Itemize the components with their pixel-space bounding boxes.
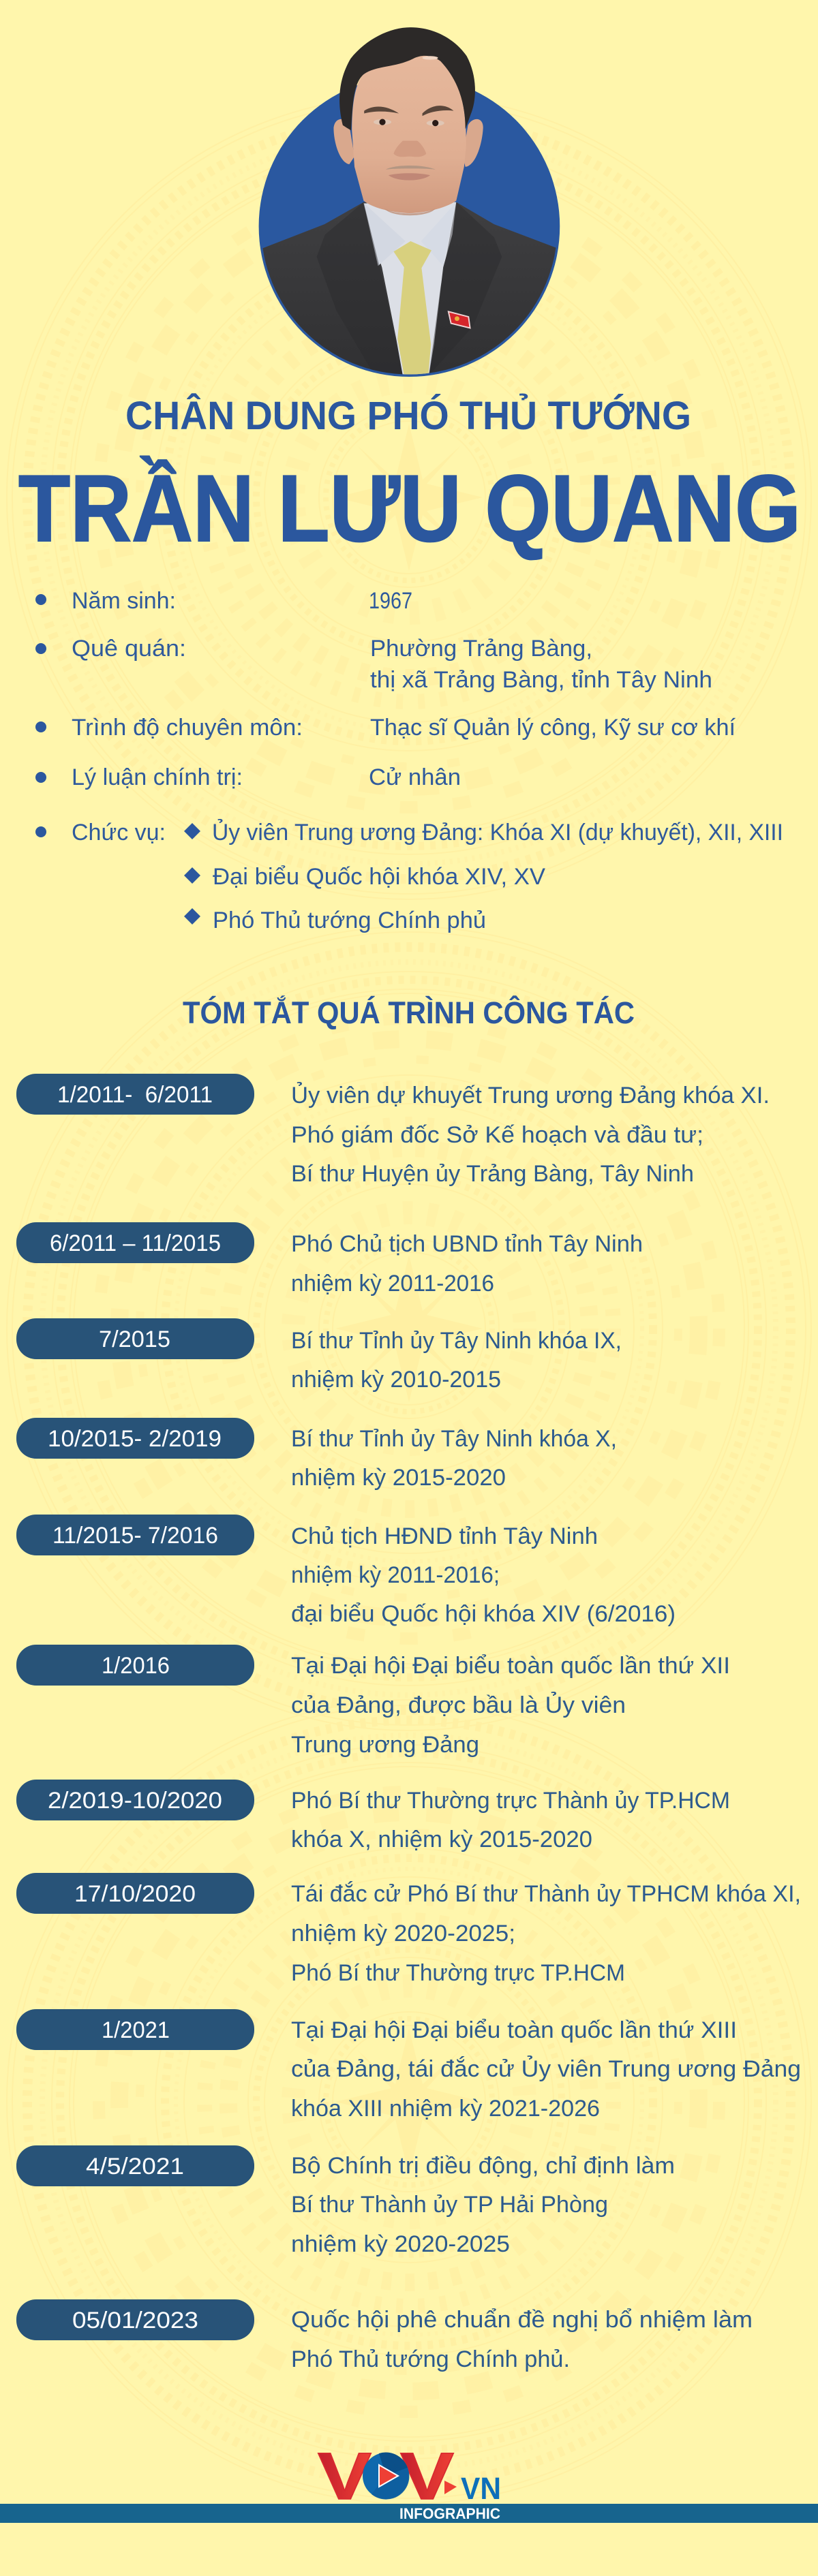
timeline entry: 1/2016: 1/2016 — [102, 1653, 170, 1679]
timeline entry: 1/2016 — [16, 1645, 730, 1758]
timeline entry: 7/2015: 7/2015 — [99, 1326, 170, 1352]
VOV.VN logo: VN — [461, 2471, 501, 2506]
timeline entry: 6/2011 - 11/2015: Phó Chủ tịch UBND tỉnh Tây Ninh — [291, 1231, 643, 1257]
timeline — [16, 1074, 801, 2372]
row: lý luận chính trị: Cử nhân — [369, 764, 461, 790]
timeline entry: 2/2019 - 10/2020: khóa X, nhiệm kỳ 2015-2020 — [291, 1827, 592, 1852]
timeline entry: 7/2015 — [16, 1318, 622, 1393]
icon: party flag badge — [449, 311, 470, 328]
row: quê quán: thị xã Trảng Bàng, tỉnh Tây Ninh — [370, 667, 712, 693]
timeline entry: 1/2021: 1/2021 — [102, 2017, 170, 2043]
timeline entry: 1/2011 - 6/2011: Phó giám đốc Sở Kế hoạch và đầu tư; — [291, 1122, 703, 1148]
timeline entry: 11/2015 - 7/2016: nhiệm kỳ 2011-2016; — [291, 1562, 500, 1588]
timeline entry: 11/2015 - 7/2016: đại biểu Quốc hội khóa XIV (6/2016) — [291, 1601, 676, 1627]
timeline entry: 17/10/2020: nhiệm kỳ 2020-2025; — [291, 1921, 515, 1946]
timeline entry: 11/2015 - 7/2016: 11/2015- 7/2016 — [52, 1523, 218, 1549]
timeline entry: 4/5/2021: Bí thư Thành ủy TP Hải Phòng — [291, 2192, 608, 2218]
timeline entry: 2/2019 - 10/2020: Phó Bí thư Thường trực Thành ủy TP.HCM — [291, 1788, 730, 1814]
portrait photo in blue circle — [249, 27, 570, 391]
VOV.VN logo: V — [318, 2439, 372, 2513]
row: lý luận chính trị: Lý luận chính trị: — [72, 764, 243, 790]
row: quê quán — [35, 636, 712, 693]
row: trình độ chuyên môn: Thạc sĩ Quản lý công, Kỹ sư cơ khí — [370, 715, 736, 741]
timeline entry: 7/2015: nhiệm kỳ 2010-2015 — [291, 1367, 501, 1393]
timeline entry: 17/10/2020: Phó Bí thư Thường trực TP.HCM — [291, 1960, 625, 1986]
icon: play circle — [363, 2452, 409, 2500]
timeline entry: 1/2011 - 6/2011 — [16, 1074, 770, 1187]
heading: tóm tắt quá trình công tác: TÓM TẮT QUÁ TRÌNH CÔNG TÁC — [183, 995, 635, 1030]
timeline entry: 11/2015 - 7/2016: Chủ tịch HĐND tỉnh Tây Ninh — [291, 1523, 598, 1549]
row: chức vụ — [35, 820, 783, 933]
row: chức vụ: Chức vụ: — [72, 820, 166, 845]
timeline entry: 7/2015: Bí thư Tỉnh ủy Tây Ninh khóa IX, — [291, 1328, 622, 1354]
timeline entry: 1/2021: Tại Đại hội Đại biểu toàn quốc lần thứ XIII — [291, 2017, 737, 2043]
timeline entry: 1/2016: Tại Đại hội Đại biểu toàn quốc lần thứ XII — [291, 1653, 730, 1679]
timeline entry: 1/2021: khóa XIII nhiệm kỳ 2021-2026 — [291, 2096, 600, 2122]
timeline entry: 1/2011 - 6/2011: 1/2011- 6/2011 — [57, 1082, 213, 1108]
VOV.VN logo — [318, 2439, 501, 2513]
row: năm sinh: Năm sinh: — [72, 588, 176, 614]
timeline entry: 10/2015 - 2/2019: nhiệm kỳ 2015-2020 — [291, 1465, 506, 1491]
row: quê quán: Quê quán: — [72, 636, 186, 662]
timeline entry: 11/2015 - 7/2016 — [16, 1515, 676, 1627]
timeline entry: 1/2021 — [16, 2009, 801, 2122]
timeline entry: 10/2015 - 2/2019: Bí thư Tỉnh ủy Tây Ninh khóa X, — [291, 1426, 617, 1452]
row: trình độ chuyên môn: Trình độ chuyên môn: — [72, 715, 303, 741]
timeline entry: 4/5/2021: 4/5/2021 — [86, 2154, 184, 2179]
timeline entry: 1/2016: Trung ương Đảng — [291, 1732, 479, 1758]
timeline entry: 05/01/2023 — [16, 2299, 753, 2372]
timeline entry: 05/01/2023: 05/01/2023 — [72, 2308, 198, 2333]
panel: personal details — [35, 588, 783, 933]
timeline entry: 1/2016: của Đảng, được bầu là Ủy viên — [291, 1692, 626, 1718]
row: quê quán: Phường Trảng Bàng, — [370, 636, 592, 662]
timeline entry: 05/01/2023: Phó Thủ tướng Chính phủ. — [291, 2346, 570, 2372]
row: chức vụ: Phó Thủ tướng Chính phủ — [213, 907, 486, 933]
timeline entry: 2/2019 - 10/2020: 2/2019-10/2020 — [48, 1788, 222, 1814]
row: chức vụ: Ủy viên Trung ương Đảng: Khóa XI (dự khuyết), XII, XIII — [212, 820, 783, 845]
timeline entry: 4/5/2021: nhiệm kỳ 2020-2025 — [291, 2231, 510, 2257]
timeline entry: 05/01/2023: Quốc hội phê chuẩn đề nghị bổ nhiệm làm — [291, 2307, 753, 2333]
timeline entry: 6/2011 - 11/2015: nhiệm kỳ 2011-2016 — [291, 1271, 494, 1297]
timeline entry: 6/2011 - 11/2015 — [16, 1222, 643, 1297]
timeline entry: 4/5/2021 — [16, 2145, 675, 2257]
row: năm sinh — [35, 588, 412, 614]
icon: small play triangle — [444, 2481, 457, 2494]
timeline entry: 6/2011 - 11/2015: 6/2011 – 11/2015 — [50, 1230, 221, 1256]
footer bar — [0, 2504, 818, 2523]
timeline entry: 10/2015 - 2/2019: 10/2015- 2/2019 — [48, 1426, 222, 1452]
timeline entry: 1/2011 - 6/2011: Ủy viên dự khuyết Trung ương Đảng khóa XI. — [291, 1083, 770, 1108]
row: chức vụ: Đại biểu Quốc hội khóa XIV, XV — [213, 864, 545, 890]
timeline entry: 2/2019 - 10/2020 — [16, 1780, 730, 1852]
timeline entry: 1/2021: của Đảng, tái đắc cử Ủy viên Trung ương Đảng — [291, 2056, 801, 2082]
timeline entry: 4/5/2021: Bộ Chính trị điều động, chỉ định làm — [291, 2153, 675, 2179]
VOV.VN logo: V — [400, 2439, 454, 2513]
timeline entry: 1/2011 - 6/2011: Bí thư Huyện ủy Trảng Bàng, Tây Ninh — [291, 1161, 694, 1187]
timeline entry: 10/2015 - 2/2019 — [16, 1418, 617, 1491]
row: năm sinh: 1967 — [369, 588, 412, 614]
row: lý luận chính trị — [35, 764, 461, 790]
row: trình độ chuyên môn — [35, 715, 736, 741]
timeline entry: 17/10/2020: 17/10/2020 — [74, 1881, 196, 1907]
timeline entry: 17/10/2020 — [16, 1873, 801, 1986]
timeline entry: 17/10/2020: Tái đắc cử Phó Bí thư Thành ủy TPHCM khóa XI, — [291, 1881, 801, 1907]
footer label: infographic: INFOGRAPHIC — [399, 2505, 500, 2522]
heading: chân dung phó thủ tướng: CHÂN DUNG PHÓ THỦ TƯỚNG — [125, 394, 691, 438]
